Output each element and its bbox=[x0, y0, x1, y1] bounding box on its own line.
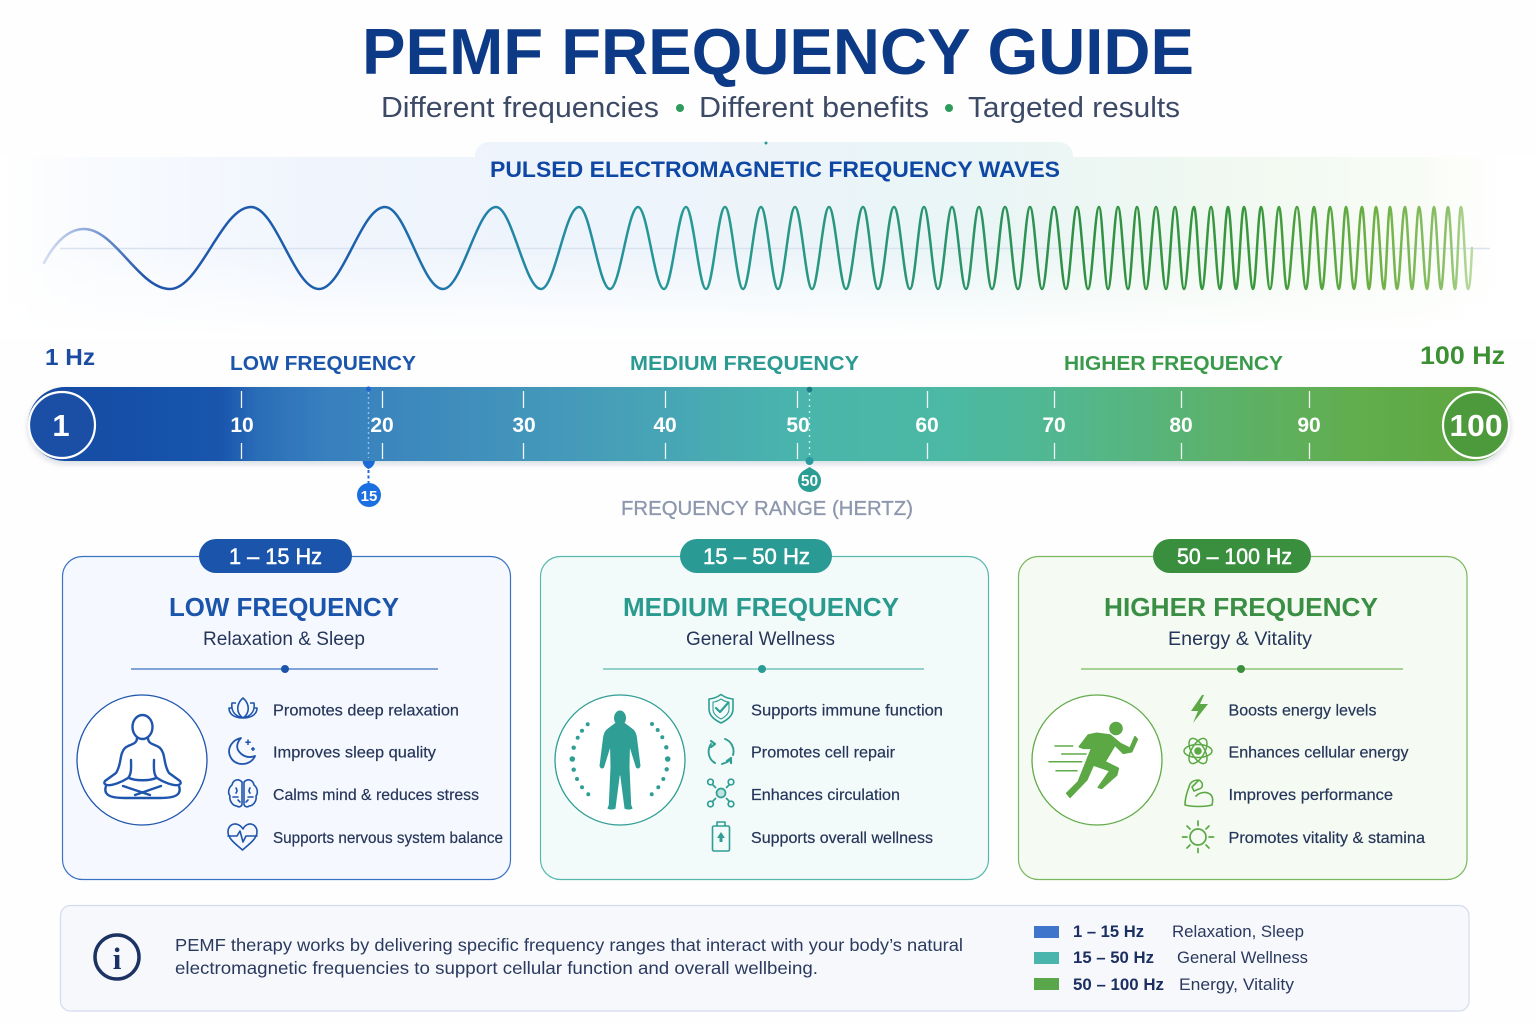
icon: circulation network bbox=[708, 779, 734, 807]
marker: 50 Hz bbox=[798, 387, 821, 492]
benefit list: Supports nervous system balance bbox=[273, 830, 503, 847]
zone label: medium frequency: MEDIUM FREQUENCY bbox=[630, 353, 860, 375]
explanatory note: electromagnetic frequencies to support cellular function and overall wellbeing. bbox=[175, 958, 818, 978]
range pill: 15 – 50 Hz bbox=[703, 544, 810, 569]
zone label: higher frequency: HIGHER FREQUENCY bbox=[1064, 353, 1284, 375]
icon: moon bbox=[229, 738, 255, 764]
icon: info bbox=[95, 935, 139, 979]
icon: lightning bolt bbox=[1191, 695, 1208, 723]
scale end label: 100 Hz: 100 Hz bbox=[1420, 342, 1505, 370]
benefit list: Enhances circulation bbox=[751, 787, 900, 804]
benefit list: Supports immune function bbox=[751, 702, 943, 720]
scale start circle: 1 bbox=[52, 408, 70, 443]
benefit list: Supports overall wellness bbox=[751, 830, 933, 847]
icon: heart pulse bbox=[228, 824, 257, 850]
icon: sun bbox=[1182, 821, 1214, 852]
explanatory note: PEMF therapy works by delivering specific frequency ranges that interact with your body’s natural bbox=[175, 935, 963, 955]
benefit list: Promotes cell repair bbox=[751, 744, 896, 762]
marker: 50 Hz: 50 bbox=[801, 473, 818, 490]
range pill: 50 – 100 Hz bbox=[1177, 544, 1292, 569]
panel: low frequency bbox=[62, 539, 510, 880]
frequency scale bar: 90 bbox=[1297, 414, 1321, 437]
benefit list: Promotes vitality & stamina bbox=[1228, 830, 1425, 847]
legend: General Wellness bbox=[1177, 948, 1308, 967]
frequency scale bar: 30 bbox=[512, 414, 536, 437]
icon: renewal cycle bbox=[709, 739, 734, 764]
frequency scale bar bbox=[28, 387, 1510, 461]
frequency scale bar: 20 bbox=[370, 414, 394, 437]
axis label: FREQUENCY RANGE (HERTZ) bbox=[621, 498, 913, 520]
legend: Relaxation, Sleep bbox=[1172, 922, 1304, 941]
icon: brain bbox=[229, 780, 257, 807]
icon: runner bbox=[1032, 695, 1162, 825]
benefit list: Improves sleep quality bbox=[273, 744, 436, 762]
wave heading: PULSED ELECTROMAGNETIC FREQUENCY WAVES bbox=[490, 157, 1060, 182]
range pill: 1 – 15 Hz bbox=[229, 544, 322, 569]
scale end circle: 100 bbox=[1450, 408, 1502, 443]
panel: higher frequency bbox=[1018, 539, 1467, 880]
legend: 1 – 15 Hz bbox=[1073, 922, 1144, 941]
icon: info: i bbox=[113, 941, 122, 976]
frequency scale bar: 70 bbox=[1042, 414, 1066, 437]
marker: 15 Hz bbox=[357, 386, 381, 507]
icon: atom bbox=[1184, 736, 1212, 766]
scale end label: 1 Hz: 1 Hz bbox=[45, 344, 95, 370]
benefit list: Calms mind & reduces stress bbox=[273, 787, 479, 804]
scale start circle bbox=[29, 392, 95, 458]
card heading: HIGHER FREQUENCY bbox=[1104, 592, 1378, 622]
benefit list: Promotes deep relaxation bbox=[273, 702, 459, 720]
frequency wave bbox=[44, 207, 1472, 289]
benefit list: Boosts energy levels bbox=[1228, 702, 1376, 720]
marker: 15 Hz: 15 bbox=[361, 488, 377, 505]
benefit list bbox=[751, 702, 943, 847]
legend: Energy, Vitality bbox=[1179, 975, 1295, 994]
scale end circle bbox=[1443, 392, 1509, 458]
benefit list bbox=[1228, 702, 1425, 847]
frequency scale bar: 60 bbox=[915, 414, 939, 437]
explanatory note bbox=[175, 935, 963, 978]
legend: 50 – 100 Hz bbox=[1073, 975, 1164, 994]
icon: shield bbox=[709, 694, 733, 723]
subtitle: Different frequencies bbox=[381, 92, 659, 124]
icon: body with energy dots bbox=[555, 695, 685, 825]
range pill bbox=[1153, 539, 1311, 573]
title: PEMF FREQUENCY GUIDE bbox=[362, 15, 1194, 88]
range pill bbox=[199, 539, 352, 573]
legend: 15 – 50 Hz bbox=[1073, 948, 1154, 967]
frequency scale bar: 40 bbox=[653, 414, 677, 437]
panel: footer note and legend bbox=[60, 906, 1469, 1011]
panel: wave section bbox=[0, 142, 1536, 338]
benefit list: Improves performance bbox=[1228, 787, 1393, 804]
frequency scale bar: 10 bbox=[230, 414, 254, 437]
card heading: MEDIUM FREQUENCY bbox=[623, 592, 899, 622]
legend bbox=[1034, 922, 1308, 994]
icon: lotus bbox=[229, 698, 257, 718]
frequency scale bar: 80 bbox=[1169, 414, 1193, 437]
zone label: low frequency: LOW FREQUENCY bbox=[230, 353, 417, 375]
card subtitle: General Wellness bbox=[686, 629, 835, 650]
range pill bbox=[680, 539, 832, 573]
icon: meditation figure bbox=[77, 695, 207, 825]
card heading: LOW FREQUENCY bbox=[169, 592, 399, 622]
subtitle bbox=[381, 92, 1180, 124]
benefit list bbox=[273, 702, 503, 847]
benefit list: Enhances cellular energy bbox=[1228, 744, 1408, 762]
subtitle: Different benefits bbox=[699, 92, 929, 124]
panel: medium frequency bbox=[540, 539, 988, 880]
card subtitle: Energy & Vitality bbox=[1168, 629, 1313, 650]
icon: battery bbox=[712, 822, 730, 851]
card subtitle: Relaxation & Sleep bbox=[203, 629, 365, 650]
frequency scale bar: 50 bbox=[786, 414, 810, 437]
icon: flexed arm bbox=[1185, 780, 1213, 806]
subtitle: Targeted results bbox=[968, 92, 1180, 124]
